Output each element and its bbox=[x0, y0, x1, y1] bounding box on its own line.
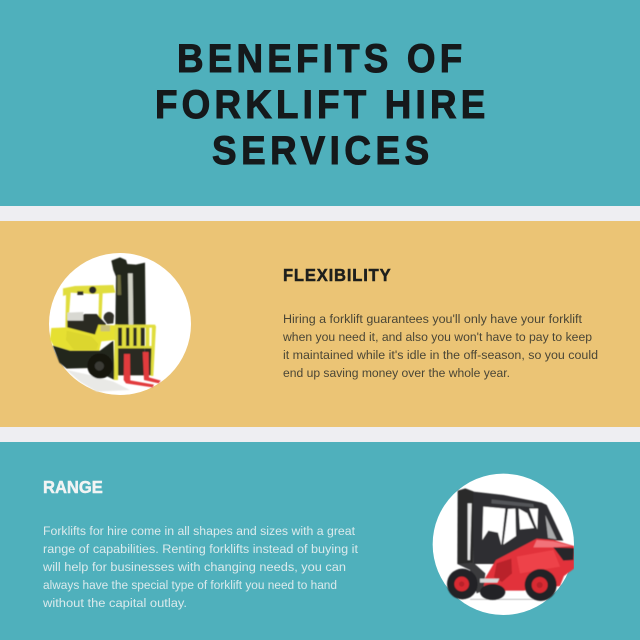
cab windows bbox=[482, 507, 505, 545]
text block: flexibility body: end up saving money over the whole year. bbox=[283, 366, 510, 380]
heading: flexibility: FLEXIBILITY bbox=[283, 264, 391, 285]
lower chassis bbox=[53, 341, 115, 380]
cab interior bbox=[67, 314, 106, 337]
chassis bbox=[457, 563, 485, 593]
icon: yellow forklift photo in circle bbox=[49, 253, 191, 395]
overhead guard bbox=[63, 285, 115, 327]
icon: red forklift photo in circle bbox=[433, 474, 574, 615]
front wheel bbox=[87, 353, 113, 379]
text block: flexibility body: when you need it, and also you won't have to pay to keep bbox=[282, 330, 592, 344]
text block: flexibility body: it maintained while it's idle in the off-season, so you could bbox=[283, 348, 598, 362]
text block: range body bbox=[42, 524, 359, 610]
mast bbox=[111, 257, 146, 326]
load backrest bbox=[117, 326, 145, 375]
text block: range body: Forklifts for hire come in all shapes and sizes with a great bbox=[43, 524, 356, 538]
text block: flexibility body: Hiring a forklift guarantees you'll only have your forklift bbox=[283, 312, 583, 326]
title: SERVICES bbox=[212, 129, 429, 173]
front wheel bbox=[447, 569, 478, 599]
rear-centre wheel bbox=[480, 584, 505, 600]
mast bbox=[457, 488, 474, 564]
text block: range body: range of capabilities. Renting forklifts instead of buying it bbox=[43, 542, 359, 556]
panel: flexibility bbox=[0, 221, 640, 427]
heading: range: RANGE bbox=[43, 476, 103, 497]
red forks bbox=[124, 354, 154, 387]
text block: flexibility body bbox=[282, 312, 598, 380]
roof highlight bbox=[491, 499, 534, 507]
red body bbox=[484, 539, 574, 591]
title: BENEFITS OF bbox=[177, 37, 462, 81]
title: FORKLIFT HIRE bbox=[155, 83, 485, 127]
text block: range body: will help for businesses with changing needs, you can bbox=[42, 560, 346, 574]
title bbox=[155, 37, 485, 173]
cab silhouette bbox=[473, 492, 563, 564]
panel: range bbox=[43, 474, 574, 615]
body bbox=[50, 325, 115, 351]
text block: range body: always have the special type of forklift you need to hand bbox=[43, 578, 337, 592]
rear wheel bbox=[525, 569, 557, 601]
header panel background bbox=[0, 0, 640, 206]
text block: range body: without the capital outlay. bbox=[42, 596, 187, 610]
